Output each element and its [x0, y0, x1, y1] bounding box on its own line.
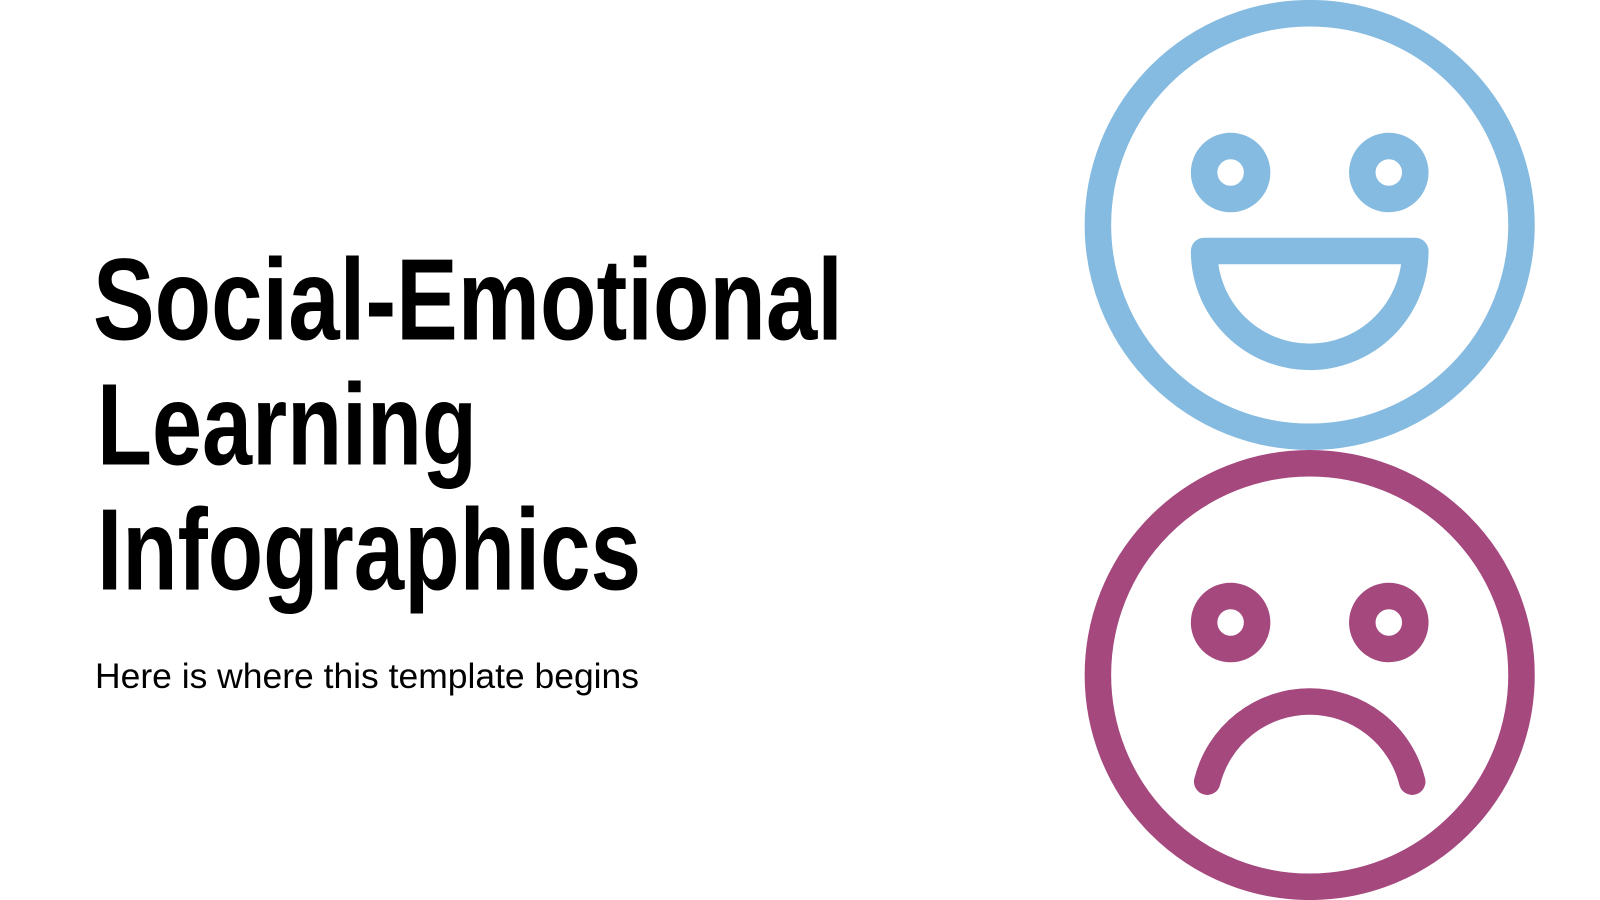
happy right eye	[1362, 146, 1415, 199]
title	[93, 234, 843, 614]
sad mouth	[1207, 701, 1412, 782]
title line 3: Infographics	[97, 484, 641, 614]
happy mouth	[1204, 251, 1415, 357]
sad right eye	[1362, 596, 1415, 649]
title line 2: Learning	[97, 360, 477, 490]
title line 1: Social-Emotional	[93, 234, 843, 364]
happy face outline	[1098, 13, 1521, 437]
icon: sad face	[1098, 463, 1521, 887]
sad face outline	[1098, 463, 1521, 887]
icon: happy face	[1098, 13, 1521, 437]
subtitle: Here is where this template begins	[95, 656, 639, 696]
happy left eye	[1204, 146, 1257, 199]
sad left eye	[1204, 596, 1257, 649]
